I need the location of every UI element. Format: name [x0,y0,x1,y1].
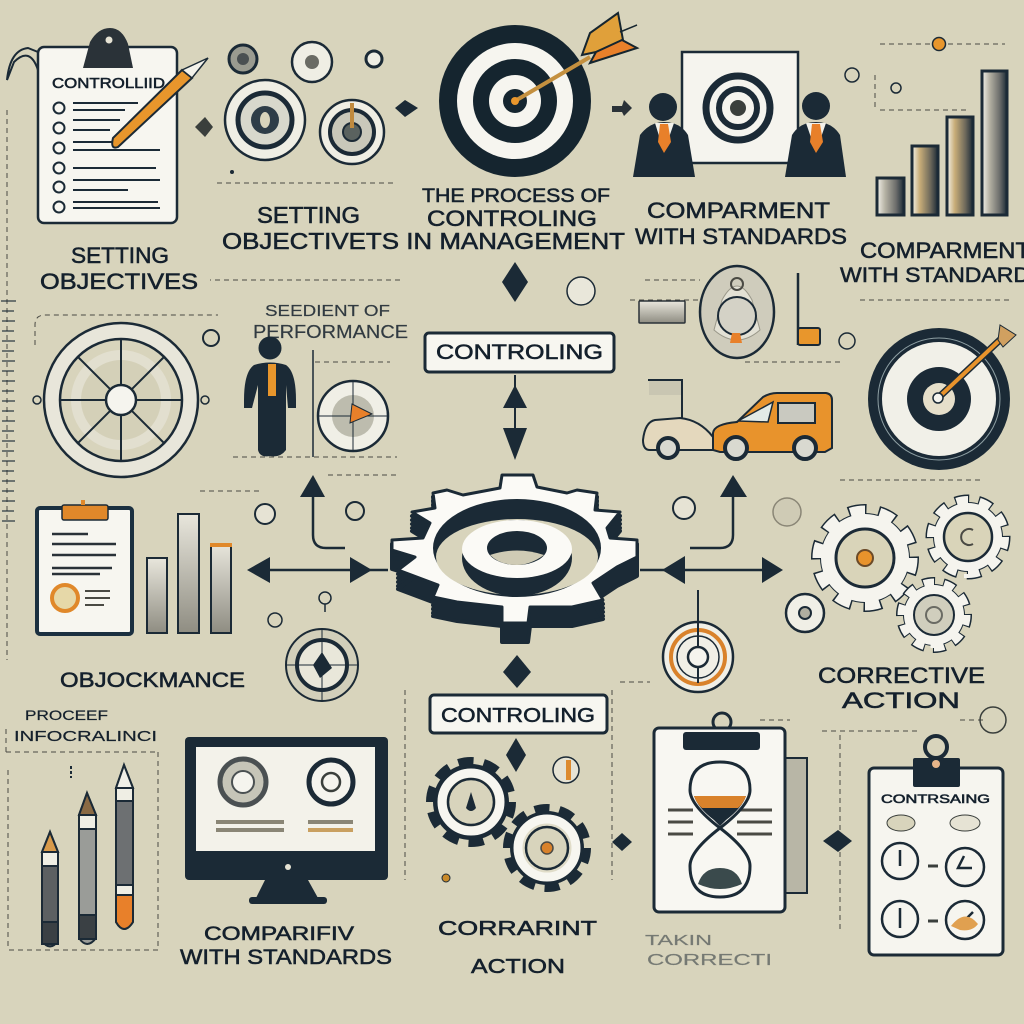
icon: two meshed gears [432,757,632,886]
heading: setting objectives left [40,243,198,294]
icon: checklist card with clocks [823,707,1006,955]
heading: corrarint action: ACTION [471,956,565,978]
icon: delivery vehicle [643,380,832,459]
heading: comparment with standards centre: WITH STANDARDS [635,224,847,249]
heading: setting objectivets in management [222,202,625,254]
heading: seedient of performance: PERFORMANCE [253,322,408,342]
heading: process infocralinci: INFOCRALINCI [14,728,157,745]
icon: ship wheel dial [33,323,219,477]
heading: corrective action right: CORRECTIVE [818,663,985,688]
heading: comparment with standards centre: COMPARMENT [647,198,830,223]
heading: setting objectives left: SETTING [71,243,169,268]
icon: performance clipboard and bars [37,500,232,634]
heading: setting objectivets in management: OBJECTIVETS IN MANAGEMENT [222,228,625,254]
arrow: central vertical connector [502,262,595,460]
arrow: right horizontal connectors [640,475,801,584]
icon: small target lower left [268,592,358,701]
icon: large bullseye with arrow [439,13,637,177]
heading: the process of controling [422,186,610,231]
heading: comparment with standard right [840,238,1024,287]
heading: comparment with standards centre [635,198,847,249]
heading: the process of controling: THE PROCESS OF [422,186,610,207]
heading: seedient of performance: SEEDIENT OF [265,303,390,320]
callout: controling bottom [430,655,607,772]
heading: the process of controling: CONTROLING [427,206,597,231]
icon: target with orange arrow right [868,325,1016,470]
heading: comparment with standard right: WITH STANDARD [840,264,1024,287]
callout: controling top [425,333,614,372]
icon: clipboard with checklist and pencil [7,28,208,223]
callout: controling top: CONTROLING [436,341,603,364]
heading: setting objectives left: OBJECTIVES [40,269,198,294]
icon: checklist card with clocks: CONTRSAING [881,792,990,806]
icon: three pencils [42,765,133,946]
icon: medal badge [639,266,855,358]
icon: clipboard with checklist and pencil: CONTROLLIID [52,75,165,92]
heading: comparifin with standards [180,924,392,969]
arrow: left horizontal connectors [247,475,388,583]
icon: monitor with dials [185,737,388,904]
heading: comparifin with standards: COMPARIFIV [204,924,354,945]
icon: orange dot legend [845,38,946,93]
heading: corrarint action: CORRARINT [438,918,597,940]
bar chart: rising bars [877,71,1007,215]
heading: seedient of performance [253,303,408,342]
heading: comparifin with standards: WITH STANDARDS [180,946,392,969]
icon: two managers with target board [612,52,846,177]
heading: comparment with standard right: COMPARMENT [860,238,1024,263]
icon: small target pair [195,42,418,174]
icon: cluster of gears [786,500,1005,648]
icon: clipboard with hourglass [654,713,807,912]
heading: corrective action right [818,663,985,713]
heading: objocmance: OBJOCKMANCE [60,669,245,692]
heading: corrarint action [438,918,597,978]
heading: taking corrective: TAKIN [645,932,712,949]
icon: person beside target [244,337,388,457]
heading: corrective action right: ACTION [842,688,960,713]
icon: central gear [392,475,637,642]
callout: controling bottom: CONTROLING [441,705,595,727]
icon: orange ring target [663,590,733,692]
heading: taking corrective: CORRECTI [647,952,772,969]
heading: taking corrective [645,932,772,969]
heading: process infocralinci: PROCEEF [25,707,108,723]
heading: process infocralinci [14,707,157,745]
heading: setting objectivets in management: SETTING [257,202,360,228]
